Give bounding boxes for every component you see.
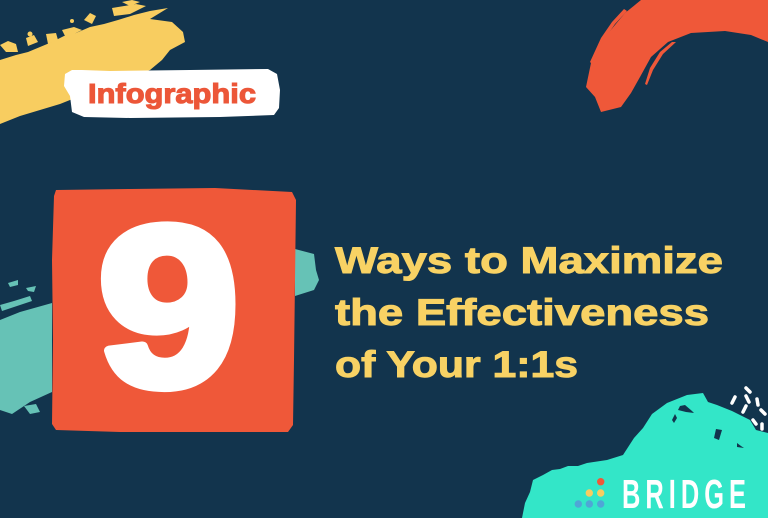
logo: Bridge — [575, 472, 746, 518]
brush stroke: yellow — [0, 0, 185, 124]
number tile — [52, 180, 296, 434]
brush stroke: turquoise corner — [522, 393, 768, 518]
brush stroke: teal left — [0, 249, 319, 414]
logo dots — [575, 478, 604, 508]
number 9: 9 — [98, 180, 239, 434]
white dashes decoration — [732, 388, 765, 429]
title: the Effectiveness — [335, 292, 709, 333]
title: of Your 1:1s — [335, 344, 578, 385]
brush gaps in turquoise — [672, 405, 744, 448]
title: Ways to Maximize — [335, 240, 723, 281]
logo wordmark: BRIDGE — [622, 472, 746, 518]
brush specks: teal — [0, 280, 40, 414]
label: Infographic: Infographic — [88, 78, 256, 109]
label: Infographic — [64, 69, 280, 118]
brush stroke: red arc — [586, 0, 768, 112]
title — [335, 240, 723, 385]
